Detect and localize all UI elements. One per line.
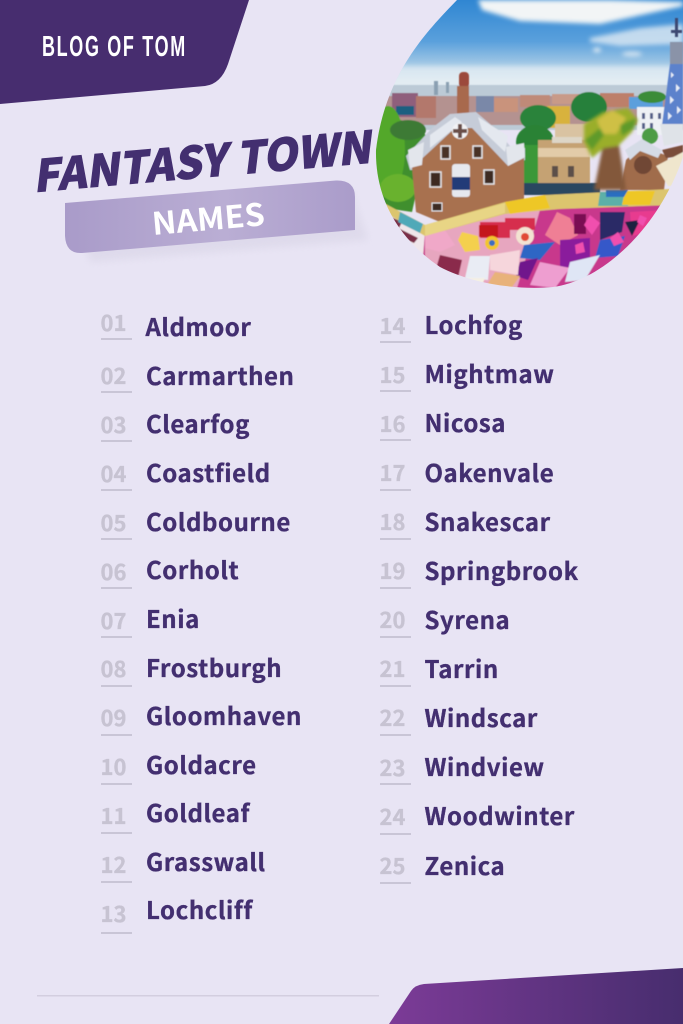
text: Goldacre	[146, 746, 257, 781]
row 03	[101, 405, 250, 442]
text: 19	[380, 554, 405, 586]
row 14	[380, 306, 523, 343]
text: 18	[380, 505, 405, 537]
text: 25	[380, 849, 405, 881]
row 17	[380, 454, 554, 491]
text: 20	[380, 603, 405, 635]
text: 02	[101, 359, 126, 391]
row 13	[101, 891, 254, 934]
text: Gloomhaven	[146, 697, 302, 732]
text: Coldbourne	[146, 503, 291, 538]
text: 07	[101, 604, 126, 636]
row 09	[101, 697, 302, 736]
text: 12	[101, 848, 126, 880]
text: Clearfog	[146, 405, 250, 440]
row 16	[380, 404, 506, 441]
text: 21	[380, 652, 405, 684]
text: Coastfield	[146, 454, 271, 489]
mosaic base	[422, 204, 660, 288]
sky	[394, 0, 683, 84]
text: 10	[101, 750, 126, 782]
row 23	[380, 748, 545, 785]
text: Lochcliff	[146, 891, 253, 926]
row 24	[380, 797, 575, 835]
row 20	[380, 601, 510, 638]
trees behind	[571, 92, 607, 122]
text: 06	[101, 555, 126, 587]
row 08	[101, 649, 282, 687]
row 11	[101, 794, 250, 834]
text: Nicosa	[424, 404, 506, 439]
text: 24	[380, 800, 405, 832]
row 05	[101, 503, 291, 540]
text: Aldmoor	[146, 308, 251, 343]
text: Goldleaf	[146, 794, 250, 829]
text: 16	[380, 407, 405, 439]
text: 22	[380, 701, 405, 733]
text: Snakescar	[424, 503, 551, 538]
text: Lochfog	[424, 306, 523, 341]
text: Springbrook	[424, 552, 579, 587]
text: 01	[101, 306, 126, 338]
text: Corholt	[146, 551, 239, 586]
text: Grasswall	[146, 843, 266, 878]
photo: Park Güell view	[370, 0, 683, 295]
footer ribbon	[389, 968, 683, 1024]
subtitle band	[65, 180, 368, 262]
city	[370, 85, 683, 130]
text: 05	[101, 506, 126, 538]
beige building	[538, 140, 590, 186]
row 07	[101, 600, 200, 638]
row 25	[380, 847, 505, 884]
text: Zenica	[424, 847, 505, 882]
text: 23	[380, 751, 405, 783]
text: Carmarthen	[146, 357, 294, 392]
right house	[620, 146, 668, 190]
title: FANTASY TOWN	[32, 111, 378, 205]
text: Windview	[424, 748, 545, 783]
text: 14	[380, 309, 405, 341]
white curved ledge	[656, 152, 683, 186]
gatehouse	[459, 72, 469, 88]
row 02	[101, 357, 294, 393]
bench top	[384, 189, 672, 236]
row 10	[101, 746, 257, 785]
text: 15	[380, 358, 405, 390]
text: Enia	[146, 600, 200, 635]
row 22	[380, 699, 538, 736]
text: 17	[380, 456, 405, 488]
text: 11	[101, 799, 126, 831]
text: 03	[101, 408, 126, 440]
palm tree	[584, 108, 638, 190]
footer rule	[37, 995, 379, 996]
text: Woodwinter	[424, 797, 575, 832]
text: Syrena	[424, 601, 510, 636]
logo text: BLOG OF TOM	[42, 31, 185, 63]
row 12	[101, 843, 266, 883]
text: Frostburgh	[146, 649, 282, 684]
text: Mightmaw	[424, 355, 554, 390]
trees left	[396, 106, 414, 115]
row 21	[380, 650, 499, 687]
text: 04	[101, 457, 126, 489]
row 15	[380, 355, 554, 392]
text: Tarrin	[424, 650, 499, 685]
name list, column 2	[380, 306, 579, 884]
subtitle text: NAMES	[150, 189, 266, 244]
row 01	[101, 306, 251, 343]
row 04	[101, 454, 271, 491]
row 18	[380, 503, 551, 540]
text: 08	[101, 652, 126, 684]
text: Windscar	[424, 699, 538, 734]
row 06	[101, 551, 239, 589]
mosaic tower	[671, 18, 682, 37]
text: 09	[101, 701, 126, 733]
name list, column 1	[101, 306, 302, 934]
text: 13	[101, 897, 126, 929]
logo badge	[0, 0, 249, 104]
text: Oakenvale	[424, 454, 554, 489]
row 19	[380, 552, 579, 589]
